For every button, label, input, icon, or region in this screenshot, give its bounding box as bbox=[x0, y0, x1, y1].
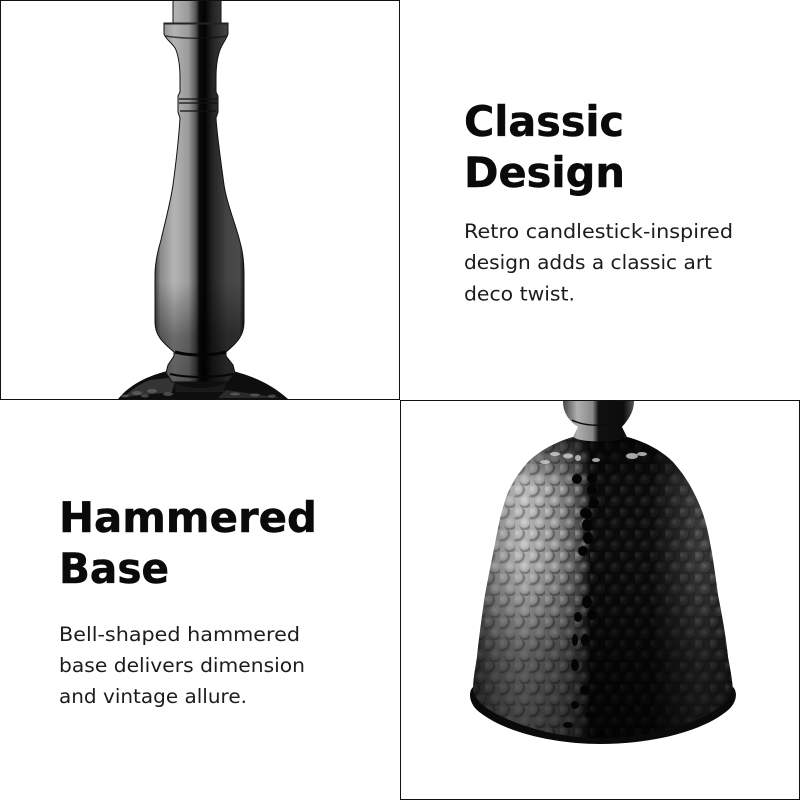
text block: hammered base description: Bell-shaped hammered bbox=[59, 623, 300, 646]
shoulder highlights bbox=[540, 452, 647, 464]
dark dimple seam bbox=[563, 473, 599, 728]
text block: hammered base description: and vintage allure. bbox=[59, 685, 247, 708]
dome of hammered base bbox=[118, 369, 288, 399]
panel: hammered bell photo bbox=[400, 400, 800, 800]
bell rim bbox=[470, 687, 736, 744]
text block: classic design description bbox=[464, 220, 733, 306]
bell body bbox=[473, 437, 733, 738]
heading: Classic Design: Design bbox=[464, 148, 625, 197]
text block: classic design description: design adds a classic art bbox=[464, 251, 712, 274]
candlestick stem bbox=[155, 0, 244, 392]
heading: Hammered Base bbox=[59, 493, 317, 593]
text block: classic design description: deco twist. bbox=[464, 282, 575, 306]
heading: Classic Design: Classic bbox=[464, 97, 624, 146]
text block: hammered base description: base delivers dimension bbox=[59, 654, 305, 677]
hammered dimple texture bbox=[473, 437, 733, 738]
heading: Classic Design bbox=[464, 97, 625, 197]
hammered rim detail bbox=[121, 389, 276, 398]
text block: hammered base description bbox=[59, 623, 305, 708]
heading: Hammered Base: Hammered bbox=[59, 493, 317, 542]
heading: Hammered Base: Base bbox=[59, 544, 169, 593]
text block: classic design description: Retro candlestick-inspired bbox=[464, 220, 733, 243]
ball finial and neck bbox=[563, 401, 634, 442]
panel: candlestick photo bbox=[0, 0, 400, 400]
